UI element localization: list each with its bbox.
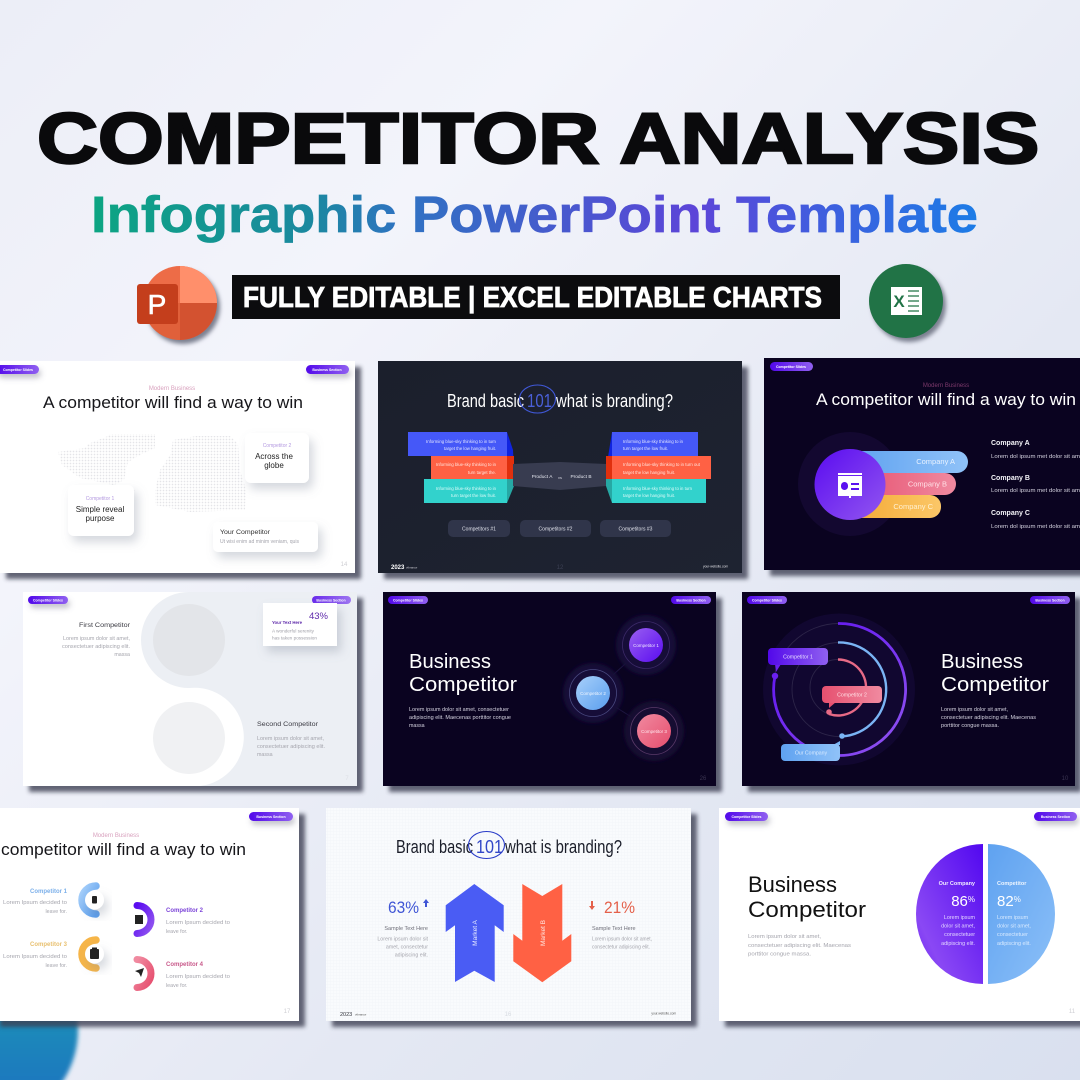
card: competitor 1: purpose [86,514,115,523]
body text: porttitor congue massa. [941,723,999,729]
heading: Brand basic [447,391,524,411]
body text: Lorem ipsum dolor sit amet, [748,934,821,940]
body text: consectetuer adipiscing elit. Maecenas [941,715,1036,721]
eyebrow: Modern Business [93,833,139,839]
icon: Excel [869,264,946,342]
card: competitor 2: Competitor 2 [263,443,292,449]
chart: our company half: consectetuer [944,932,975,938]
card: competitor 2: globe [264,461,284,470]
panel: slide 11 pie comparison [719,808,1080,1027]
tag left [725,812,768,821]
card: competitor 1: Competitor 1 [86,496,115,502]
tag left [770,362,813,371]
dotted world map [58,434,246,512]
body text: consectetuer adipiscing elit. Maecenas [748,943,851,949]
item: competitor 2: Lorem Ipsum decided to [166,920,230,926]
right bars: target the low hanging fruit. [623,470,675,475]
footer: 16 [505,1012,512,1018]
chart: competitor half: Competitor [997,881,1027,887]
chart: our company half [916,844,983,984]
chart: our company half: % [968,895,975,904]
panel: slide 10 concentric rings [742,592,1080,792]
panel: slide company bars dark [764,358,1080,576]
heading [941,651,1049,696]
tag right: Business Section [1041,815,1070,819]
circle: first competitor [153,604,225,676]
legend: companies: Lorem dol ipsum met dolor sit am [991,454,1080,460]
eyebrow: Modern Business [149,386,195,392]
heading: 101 [527,391,552,411]
panel: slide 16 brand basic arrows [326,808,697,1027]
chart: our company half: 86 [951,893,968,910]
right bars [606,432,711,503]
stat: 63 percent: Lorem ipsum dolor sit [377,936,429,942]
panel: slide 12 brand basic dark [378,361,748,579]
tag left [388,596,428,604]
tag right [249,812,293,821]
heading: A competitor will find a way to win [816,390,1076,409]
label: competitor 2: Competitor 2 [837,692,867,698]
page number: 7 [345,776,349,782]
tag right [671,596,711,604]
circle: competitor 2: Competitor 2 [580,691,606,696]
left bars: Informing blue-sky thinking to in [436,486,497,491]
chart: competitor half [988,844,1055,984]
footer [391,564,728,571]
body text: porttitor congue massa. [748,952,811,958]
circle: competitor 1: Competitor 1 [633,643,659,648]
item: competitor 2 [135,906,230,935]
left bars: target the low hanging fruit. [444,446,496,451]
stat: 21 percent: Lorem ipsum dolor sit amet, [592,936,652,942]
text: second competitor: consectetuer adipiscing elit. [257,744,325,750]
circle: competitor 1 [622,622,670,668]
card: 43 percent: 43% [309,611,329,622]
connector: product A vs product B [513,462,606,490]
eyebrow: Modern Business [923,383,969,389]
subtitle: Infographic PowerPoint Template [91,187,978,243]
chart: competitor half: adipiscing elit. [997,941,1031,947]
heading: what is branding? [555,391,673,411]
tag left: Competitor Slides [732,815,762,819]
text: first competitor: massa [114,652,130,658]
buttons: competitors [448,520,671,537]
tag left [28,596,68,604]
item: competitor 3: Lorem Ipsum decided to [3,954,67,960]
chart: competitor half: 82 [997,893,1014,910]
chart: company bars: Company C [893,502,934,511]
footer: your.website.com [651,1012,676,1016]
diagram: competitor circles [563,615,684,761]
item: competitor 1: Lorem Ipsum decided to [3,900,67,906]
item: competitor 3: leave for. [46,963,67,969]
item: competitor 2: leave for. [166,929,188,935]
heading [447,385,673,413]
text: second competitor: massa [257,752,273,758]
footer [340,1012,676,1018]
card: your competitor [213,522,318,552]
tag right: Business Section [316,598,346,602]
heading: Business [409,651,491,673]
chart: company bars: Company A [916,457,955,466]
connector: product A vs product B: Product B [570,474,592,480]
card: competitor 2: Across the [255,452,293,461]
stat: 21 percent: 21% [604,898,635,917]
item: competitor 3: Competitor 3 [30,942,68,948]
text: second competitor: Lorem ipsum dolor sit amet, [257,736,324,742]
heading: Business [941,651,1023,673]
text: second competitor: Second Competitor [257,721,319,728]
legend: companies: Lorem dol ipsum met dolor sit am [991,524,1080,530]
text: first competitor: First Competitor [79,622,131,629]
panel: slide 26 three competitors [383,592,722,792]
page number: 26 [700,776,707,782]
tag right [1030,596,1070,604]
s-curve [141,592,357,786]
heading: what is branding? [504,837,622,857]
chart: competitor half: % [1014,895,1021,904]
tag right: Business Section [312,368,342,372]
page number: 10 [1062,776,1069,782]
page number: 14 [341,562,348,568]
left bars [408,432,514,503]
item: competitor 3 [3,940,104,969]
legend: companies: Company A [991,440,1030,447]
card: competitor 1 [68,485,134,536]
heading: Business [748,872,837,897]
chart: our company half: Our Company [939,881,976,887]
chart: company bars: Company B [908,480,947,488]
tag right [1034,812,1077,821]
tag left: Competitor Slides [33,598,63,602]
footer: 2023 [340,1012,352,1018]
connector: product A vs product B: vs [558,475,562,480]
body text: massa [409,723,425,729]
right bars: Informing blue-sky thinking to in [623,439,684,444]
tag right: Business Section [1035,598,1065,602]
label: competitor 1: Competitor 1 [783,654,813,660]
card: your competitor: Your Competitor [220,529,271,536]
title: COMPETITOR ANALYSIS [37,98,1039,179]
label: our company: Our Company [795,750,828,756]
card: competitor 2 [245,433,309,483]
heading: Competitor [409,674,517,696]
label: our company [781,741,840,761]
banner: fully editable [232,275,840,319]
body text: Lorem ipsum dolor sit amet, [941,707,1008,713]
item: competitor 1: leave for. [46,909,67,915]
heading [409,651,517,696]
left bars: Informing blue-sky thinking to in turn [426,439,497,444]
tag left: Competitor Slides [752,598,782,602]
icon: Excel: X [893,292,905,311]
arrow: market A up [446,884,504,982]
body text [941,707,1036,729]
text: first competitor: consectetuer adipiscing elit. [62,644,130,650]
card: your competitor: Ut wisi enim ad minim veniam, quis [220,539,299,545]
body text [748,934,851,958]
chart: company bars [798,432,968,536]
heading: Competitor [941,674,1049,696]
heading: competitor will find a way to win [1,840,246,859]
banner: fully editable: FULLY EDITABLE | EXCEL EDITABLE CHARTS [243,282,822,314]
stat: 63 percent [377,898,429,958]
text: second competitor [257,721,325,758]
item: competitor 2: Competitor 2 [166,908,204,914]
legend: companies: Lorem dol ipsum met dolor sit am [991,488,1080,494]
right bars: Informing blue-sky thinking to in turn out [623,462,701,467]
chart: our company half: dolor sit amet, [941,924,975,930]
footer: vibrance [355,1012,367,1016]
buttons: competitors: Competitors #1 [462,526,496,532]
stat: 21 percent [589,898,652,950]
heading: Brand basic [396,837,473,857]
item: competitor 4 [135,960,230,989]
heading: Competitor [748,897,866,922]
tag right [312,596,351,604]
stat: 63 percent: 63% [388,898,419,917]
tag left: Competitor Slides [3,368,33,372]
chart: competitor half: consectetuer [997,932,1028,938]
text: first competitor [62,622,131,658]
page number: 11 [1069,1009,1076,1015]
card: 43 percent: has taken possession [272,636,317,640]
item: competitor 4: leave for. [166,983,188,989]
circle: competitor 2 [570,670,616,716]
buttons: competitors: Competitors #3 [619,526,653,532]
body text [409,707,511,729]
panel: slide 7 first and second competitor [23,592,363,792]
circle: competitor 3: Competitor 3 [641,729,667,734]
tag left [747,596,787,604]
card: 43 percent [263,603,337,646]
stat: 63 percent: adipiscing elit. [395,952,428,958]
item: competitor 1 [3,886,104,915]
body text: Lorem ipsum dolor sit amet, consectetuer [409,707,509,713]
right bars: turn target the low fruit. [623,446,668,451]
card: competitor 1: Simple reveal [76,505,124,514]
stat: 63 percent: Sample Text Here [384,926,428,932]
legend: companies [991,440,1080,530]
left bars: turn target the. [468,470,496,475]
buttons: competitors: Competitors #2 [539,526,573,532]
tag left: Competitor Slides [776,365,806,369]
icon: PowerPoint [137,266,220,344]
item: competitor 4: Lorem Ipsum decided to [166,974,230,980]
tag right: Business Section [256,815,286,819]
left bars: turn target the low fruit. [451,493,496,498]
icon: PowerPoint: P [148,289,166,320]
chart: competitor half: Lorem ipsum [997,915,1029,921]
card: 43 percent: A wonderful serenity [272,628,315,634]
chart: our company half: Lorem ipsum [944,915,975,921]
heading: 101 [476,837,503,857]
stat: 21 percent: consectetur adipiscing elit. [592,944,650,950]
item: competitor 4: Competitor 4 [166,962,204,968]
right bars: Informing blue-sky thinking to in turn [623,486,693,491]
stat: 21 percent: Sample Text Here [592,926,636,932]
card: 43 percent: Your Text Here [272,620,303,625]
heading: A competitor will find a way to win [43,393,303,412]
arrow: market B down [513,884,571,982]
footer: vibrance [406,566,418,570]
tag right: Business Section [676,598,706,602]
right bars: target the low hanging fruit. [623,493,675,498]
decorative blue blob [0,936,78,1080]
footer: 2023 [391,565,405,571]
tag left: Competitor Slides [393,598,423,602]
circle: second competitor [153,702,225,774]
circle: competitor 3 [630,708,678,754]
icon: presentation board [838,473,862,498]
tag right [306,365,349,374]
text: first competitor: Lorem ipsum dolor sit amet, [63,636,130,642]
tag left [0,365,39,374]
stat: 63 percent: amet, consectetur [386,944,428,950]
chart: radial rings [763,614,915,766]
label: competitor 1 [768,648,828,672]
left bars: Informing blue-sky thinking to in [436,462,497,467]
heading [396,832,622,858]
arrow: market A up: Market A [472,920,479,946]
panel: slide 17 four competitors [0,808,305,1027]
body text: adipiscing elit. Maecenas porttitor congue [409,715,511,721]
arrow: market B down: Market B [540,920,547,946]
legend: companies: Company C [991,510,1030,517]
heading [748,872,866,922]
legend: companies: Company B [991,475,1030,482]
footer: your-website.com [703,564,728,568]
chart: competitor half: dolor sit amet, [997,924,1031,930]
footer: 12 [557,565,564,571]
chart: our company half: adipiscing elit. [941,941,975,947]
page number: 17 [284,1009,291,1015]
connector: product A vs product B: Product A [532,474,553,480]
panel: slide 14 world map [0,361,361,579]
label: competitor 2 [822,686,882,708]
item: competitor 1: Competitor 1 [30,889,68,895]
